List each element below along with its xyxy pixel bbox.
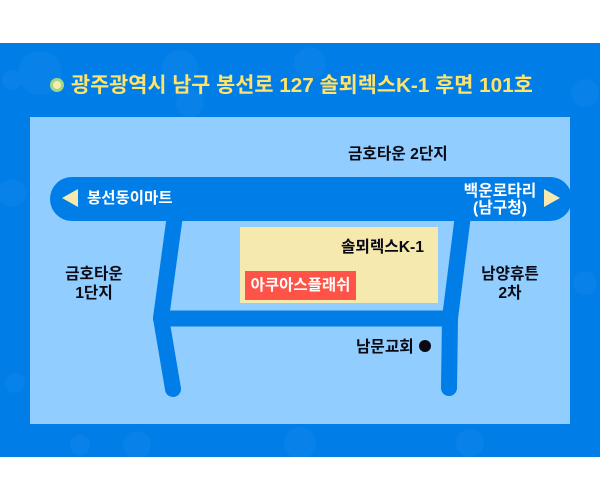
icon: right arrow — [544, 189, 560, 207]
panel: map — [30, 117, 570, 424]
label: 금호타운 2단지: 금호타운 2단지 — [348, 146, 448, 163]
label: 아쿠아스플래쉬: 아쿠아스플래쉬 — [251, 277, 350, 294]
label: 봉선동이마트: 봉선동이마트 — [87, 190, 173, 207]
label: 남양휴튼 2차 — [481, 266, 539, 302]
label: 남양휴튼 2차: 2차 — [498, 285, 522, 302]
label: 솔뫼렉스K-1: 솔뫼렉스K-1 — [341, 239, 424, 256]
title: address: 광주광역시 남구 봉선로 127 솔뫼렉스K-1 후면 101호 — [71, 74, 533, 97]
label: 백운로타리 남구청 — [464, 182, 536, 217]
label: 백운로타리 남구청: (남구청) — [473, 200, 527, 217]
label: 금호타운 1단지: 금호타운 — [65, 266, 123, 283]
building block: 솔뫼렉스K-1 — [240, 227, 438, 303]
label: 금호타운 1단지 — [65, 266, 123, 302]
icon: church marker — [419, 340, 431, 352]
label: 금호타운 1단지: 1단지 — [75, 285, 113, 302]
label: 남문교회: 남문교회 — [356, 339, 414, 356]
icon: left arrow — [62, 189, 78, 207]
label: 백운로타리 남구청: 백운로타리 — [464, 183, 536, 200]
label: 아쿠아스플래쉬 — [245, 271, 356, 300]
icon: title bullet — [50, 78, 64, 92]
label: 남양휴튼 2차: 남양휴튼 — [481, 266, 539, 283]
main road pill — [50, 177, 572, 221]
